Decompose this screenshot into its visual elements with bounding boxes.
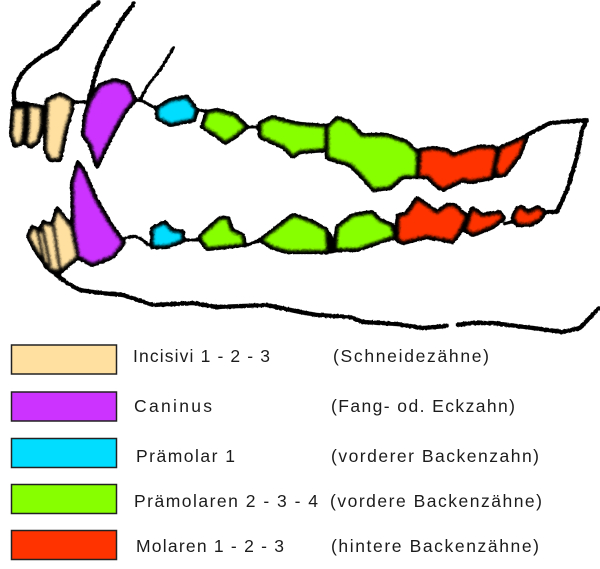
rear jaw outline [527, 120, 587, 212]
legend row: premolar 1: Prämolar 1 [136, 446, 235, 466]
upper premolars 2-4 [202, 110, 418, 190]
lower premolar 1 [152, 222, 183, 247]
upper canine [83, 80, 135, 167]
snout outline [14, 2, 259, 127]
legend row: canine [12, 392, 515, 421]
legend row: molars [12, 530, 539, 560]
legend row: incisors: (Schneidezähne) [333, 346, 489, 366]
legend row: incisors: Incisivi 1 - 2 - 3 [133, 346, 270, 366]
lower incisors [28, 208, 78, 272]
legend row: premolar 1 [12, 438, 539, 468]
legend row: molars: (hintere Backenzähne) [331, 536, 539, 556]
lower jaw [28, 162, 599, 332]
upper incisors [11, 94, 72, 160]
lower jaw outline [50, 221, 599, 332]
legend row: canine: Caninus [134, 396, 212, 416]
lower premolars 2-4 [199, 212, 395, 252]
upper premolar 1 [157, 97, 197, 125]
legend row: premolars 2-4: Prämolaren 2 - 3 - 4 [134, 491, 318, 511]
legend row: premolar 1: (vorderer Backenzahn) [331, 446, 539, 466]
legend row: premolars 2-4 [12, 484, 542, 514]
lower molars [397, 198, 545, 243]
legend row: incisors [12, 345, 489, 374]
legend row: canine: (Fang- od. Eckzahn) [331, 396, 515, 416]
lower canine [72, 162, 124, 265]
upper jaw [11, 2, 587, 212]
legend [12, 345, 542, 560]
legend row: premolars 2-4: (vordere Backenzähne) [330, 491, 542, 511]
upper molars [418, 136, 527, 190]
legend row: molars: Molaren 1 - 2 - 3 [136, 536, 284, 556]
